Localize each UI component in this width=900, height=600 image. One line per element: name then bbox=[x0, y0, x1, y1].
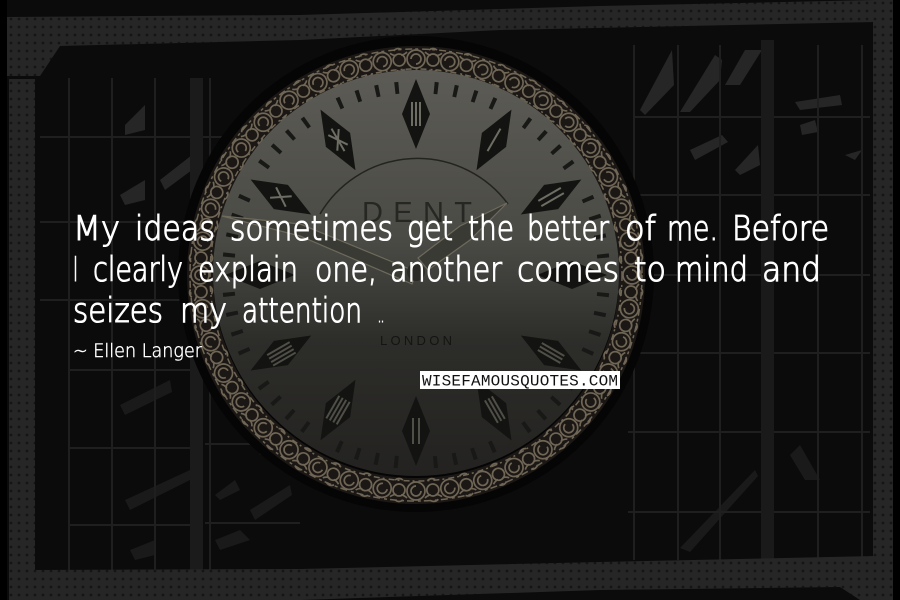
quote line 3: attention bbox=[242, 291, 362, 331]
quote line 1: get bbox=[407, 209, 453, 249]
quote line 2: to bbox=[634, 250, 666, 290]
steel column: left bbox=[9, 79, 35, 600]
quote line 2: and bbox=[762, 250, 821, 290]
quote line 2 bbox=[73, 250, 821, 290]
quote text bbox=[73, 209, 829, 331]
clock city: LONDON bbox=[380, 333, 452, 348]
quote line 2: explain bbox=[198, 250, 298, 290]
numeral strokes bbox=[267, 102, 564, 444]
quote line 1: Before bbox=[732, 209, 829, 249]
quote line 2: clearly bbox=[93, 250, 183, 290]
quote line 2: comes bbox=[517, 250, 619, 290]
ornamental ring bbox=[149, 8, 683, 542]
quote line 1: ideas bbox=[135, 209, 215, 249]
clock bezel bbox=[178, 36, 654, 512]
quote line 3 bbox=[73, 291, 384, 331]
inner dial arc bbox=[320, 158, 508, 214]
window frames: right bbox=[190, 40, 870, 570]
minute ticks bbox=[228, 87, 604, 463]
quote line 2: another bbox=[390, 250, 502, 290]
quote line 2: I bbox=[73, 250, 78, 290]
clock hands bbox=[222, 203, 507, 284]
attribution: ~ Ellen Langer bbox=[73, 340, 202, 362]
steel beam: bottom bbox=[35, 556, 893, 600]
quote line 1: My bbox=[73, 209, 120, 249]
quote line 3: my bbox=[180, 291, 227, 331]
quote line 2: one, bbox=[315, 250, 377, 290]
clock dial bbox=[213, 70, 619, 476]
quote line 3: seizes bbox=[73, 291, 163, 331]
quote line 1: the bbox=[468, 209, 514, 249]
watermark: WISEFAMOUSQUOTES.COM bbox=[422, 372, 618, 390]
quote line 1: better bbox=[527, 209, 609, 249]
quote line 2: mind bbox=[675, 250, 748, 290]
steel column: right bbox=[873, 0, 893, 600]
clock bbox=[149, 8, 683, 542]
window reflections bbox=[120, 50, 862, 205]
dim lower reflections bbox=[120, 380, 820, 560]
window frames: left bbox=[40, 78, 300, 575]
quote line 1: of bbox=[625, 209, 656, 249]
quote line 1: sometimes bbox=[230, 209, 393, 249]
quote line 1 bbox=[73, 209, 829, 249]
hour diamonds bbox=[225, 79, 607, 466]
steel beam: top bbox=[7, 0, 875, 76]
quote line 1: me. bbox=[667, 209, 718, 249]
quote line 3: .. bbox=[378, 310, 384, 326]
clock name: DENT bbox=[362, 197, 472, 229]
